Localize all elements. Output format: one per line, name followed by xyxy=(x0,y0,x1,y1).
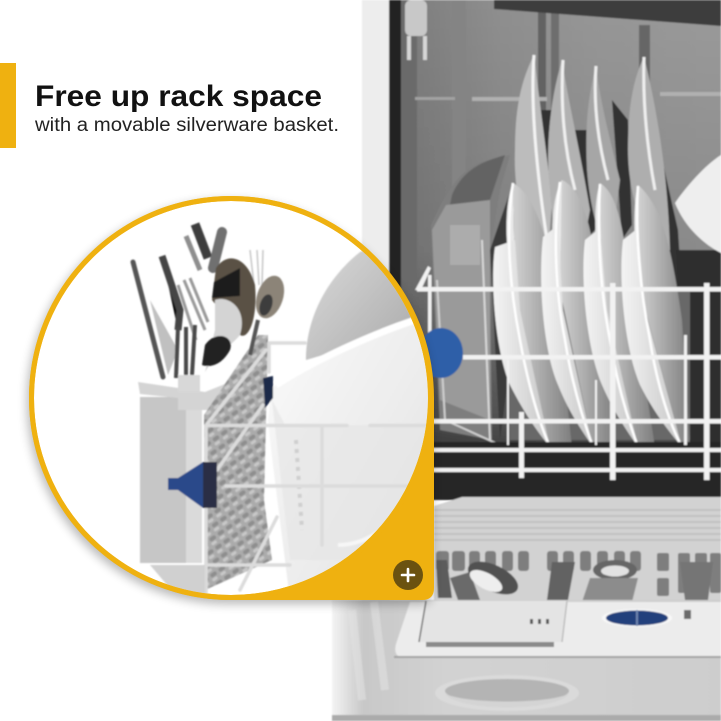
blue basket knob xyxy=(168,462,217,508)
small indicator xyxy=(684,610,691,619)
lower rack wires xyxy=(415,266,721,480)
accent bar xyxy=(0,63,16,148)
front plates xyxy=(493,180,690,447)
blue rinse-aid cap xyxy=(602,609,672,627)
magnified view xyxy=(30,198,434,600)
yellow ring xyxy=(32,198,430,598)
back plates xyxy=(515,55,670,300)
subheading: with a movable silverware basket. xyxy=(34,115,339,136)
door interior xyxy=(332,600,721,721)
dark tub floor xyxy=(420,442,721,500)
dishwasher photo xyxy=(332,0,721,721)
callout shadow xyxy=(27,200,432,604)
blue rack adjuster xyxy=(419,328,463,378)
detergent dispenser xyxy=(394,601,721,658)
dispenser lid xyxy=(419,601,567,647)
callout: zoomed basket xyxy=(29,196,434,600)
basket mesh xyxy=(204,335,272,590)
rack wires xyxy=(206,343,432,600)
white bowl xyxy=(268,320,430,600)
silverware xyxy=(133,224,289,392)
bottom plate xyxy=(150,564,205,593)
plus button xyxy=(393,560,423,590)
upper rack hinge xyxy=(405,0,721,60)
dark gaps between plates xyxy=(490,100,721,445)
silverware in basket xyxy=(436,555,713,602)
plate behind bowl xyxy=(305,251,411,360)
silverware basket in door xyxy=(434,497,721,606)
basket side panel xyxy=(138,382,224,564)
glass baking dish xyxy=(431,155,510,445)
heading: Free up rack space xyxy=(35,80,322,113)
drain ring on door xyxy=(435,675,579,711)
tub frame xyxy=(362,0,721,600)
yellow badge shape xyxy=(29,196,434,600)
blue clip xyxy=(263,376,273,408)
basket slots xyxy=(436,551,721,596)
white bowl top right xyxy=(675,155,721,253)
